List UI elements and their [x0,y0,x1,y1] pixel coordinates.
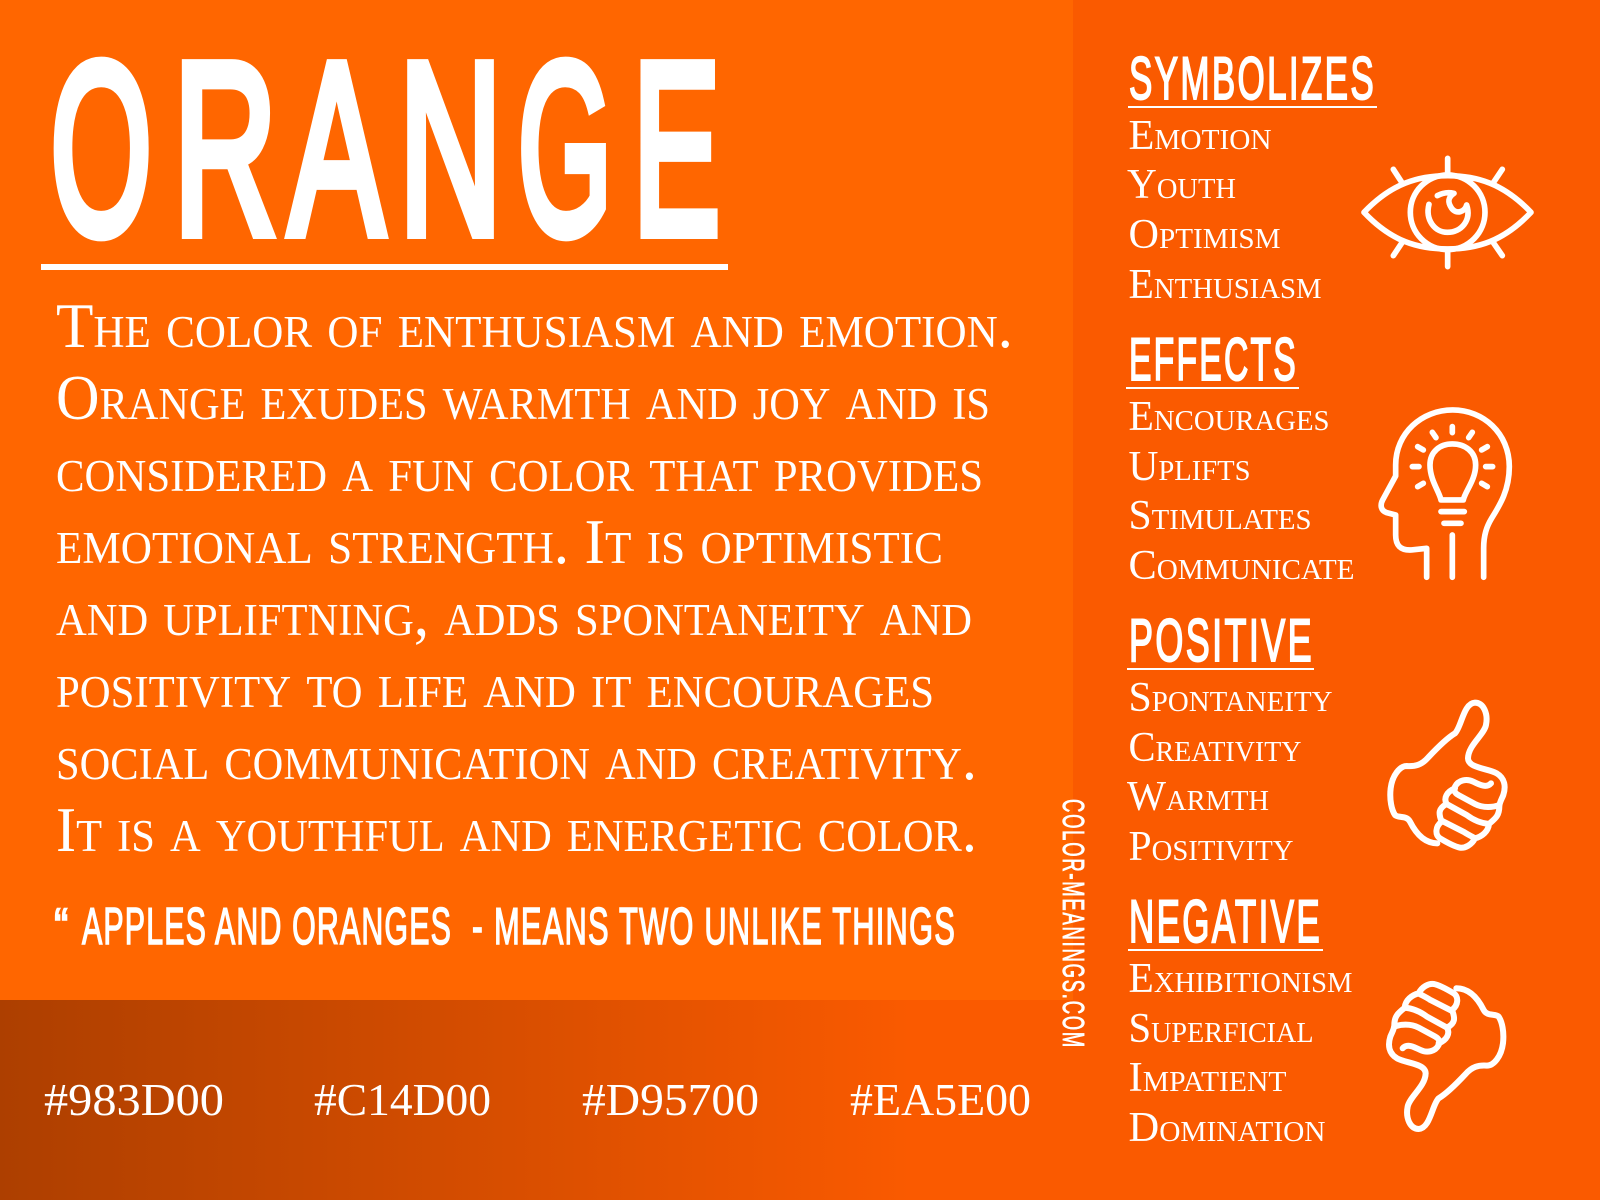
description text: It is a youthful and energetic color. [56,794,977,865]
heading: negative: NEGATIVE [1129,888,1322,955]
title: O [51,12,152,285]
list: positive: Spontaneity [1128,675,1333,721]
list: symbolizes: Enthusiasm [1128,262,1322,308]
list: positive: Warmth [1127,774,1269,820]
list: negative [1128,956,1352,1151]
title: R [174,12,277,285]
title underline [41,264,728,270]
icon: head with light bulb [1381,410,1509,577]
list: symbolizes: Youth [1127,162,1236,208]
list: symbolizes: Optimism [1128,212,1280,258]
list: effects: Communicate [1128,543,1354,589]
icon: thumbs down [1389,984,1503,1129]
list: effects: Stimulates [1128,493,1312,539]
section: positive [1127,607,1333,870]
description text: The color of enthusiasm and emotion. [56,290,1013,361]
description text: and upliftning, adds spontaneity and [56,578,972,649]
list: effects: Uplifts [1128,444,1250,490]
list: positive: Creativity [1128,725,1302,771]
description text: positivity to life and it encourages [56,650,934,721]
list: negative: Domination [1128,1105,1326,1151]
list: symbolizes [1127,113,1322,308]
list: positive [1127,675,1333,870]
description text: emotional strength. It is optimistic [56,506,943,577]
icon: eye [1364,158,1531,267]
list: effects: Encourages [1128,394,1330,440]
quote: - [472,898,484,956]
list: positive: Positivity [1128,824,1294,870]
hex code 3: #D95700 [582,1074,759,1125]
panel: hex colour band [0,1000,1073,1200]
list: negative: Exhibitionism [1128,956,1352,1002]
title: G [518,12,612,285]
section: negative [1128,888,1352,1151]
heading: positive: POSITIVE [1129,607,1314,674]
title: E [633,12,720,285]
section: symbolizes [1127,45,1377,308]
panel: main background [0,0,1073,1000]
hex code 1: #983D00 [44,1074,224,1125]
description text: Orange exudes warmth and joy and is [56,362,990,433]
list: negative: Superficial [1128,1006,1314,1052]
description text: considered a fun color that provides [56,434,983,505]
icon: thumbs up [1390,703,1505,848]
panel: sidebar background [1073,0,1600,1200]
quote: “ [54,898,70,956]
list: symbolizes: Emotion [1128,113,1272,159]
description text [56,290,1013,865]
title: N [399,12,502,285]
hex code 4: #EA5E00 [850,1074,1031,1125]
list: effects [1128,394,1354,589]
heading: effects: EFFECTS [1129,326,1298,393]
section: effects [1126,326,1354,589]
quote: MEANS TWO UNLIKE THINGS [494,898,956,956]
quote: APPLES AND ORANGES [82,898,452,956]
hex code 2: #C14D00 [314,1074,491,1125]
description text: social communication and creativity. [56,722,977,793]
list: negative: Impatient [1128,1055,1287,1101]
heading: symbolizes: SYMBOLIZES [1129,45,1376,112]
title [51,12,720,285]
title: A [289,12,384,285]
